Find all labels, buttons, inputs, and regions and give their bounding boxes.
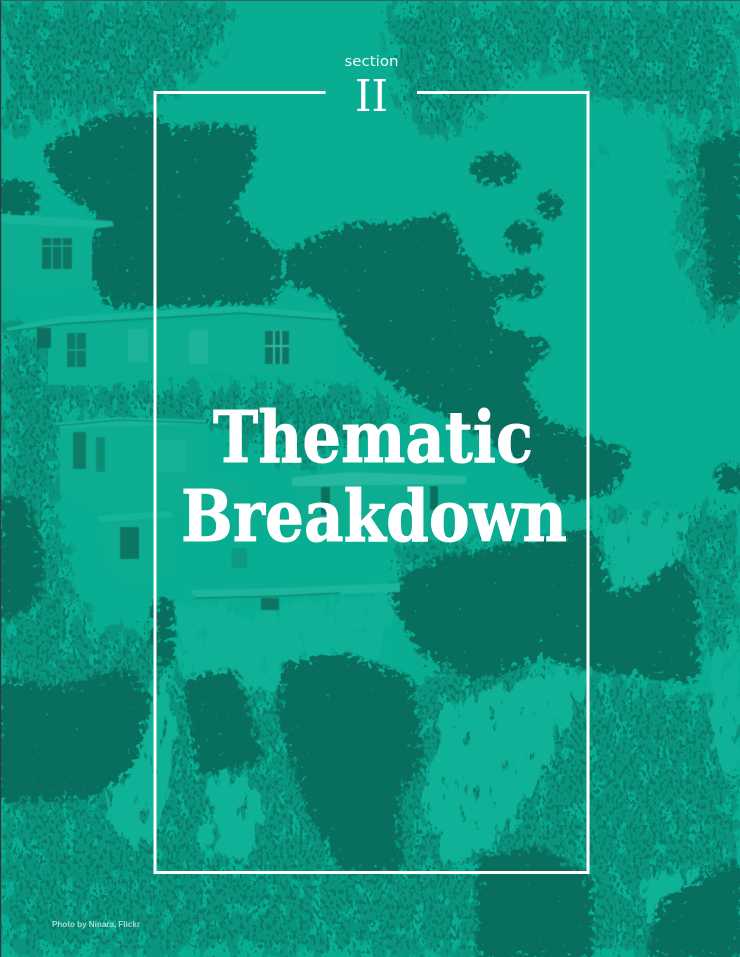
title: Breakdown xyxy=(181,474,567,558)
house: small lower xyxy=(97,511,247,585)
photo credit: Photo by Ninara, Flickr xyxy=(52,920,140,929)
section number: II xyxy=(355,71,388,122)
house: lower left xyxy=(55,417,250,510)
section label: section xyxy=(344,54,398,70)
house: top left xyxy=(0,214,114,292)
white frame with gap for section number xyxy=(155,92,588,872)
house: long middle xyxy=(6,306,337,385)
house: lower centre xyxy=(292,472,466,545)
light rock streaks on the lower cliffs xyxy=(108,510,740,925)
terrace ledge xyxy=(190,583,400,610)
title: Thematic xyxy=(213,395,533,479)
title xyxy=(181,395,567,558)
houses on the hillside xyxy=(0,214,466,610)
